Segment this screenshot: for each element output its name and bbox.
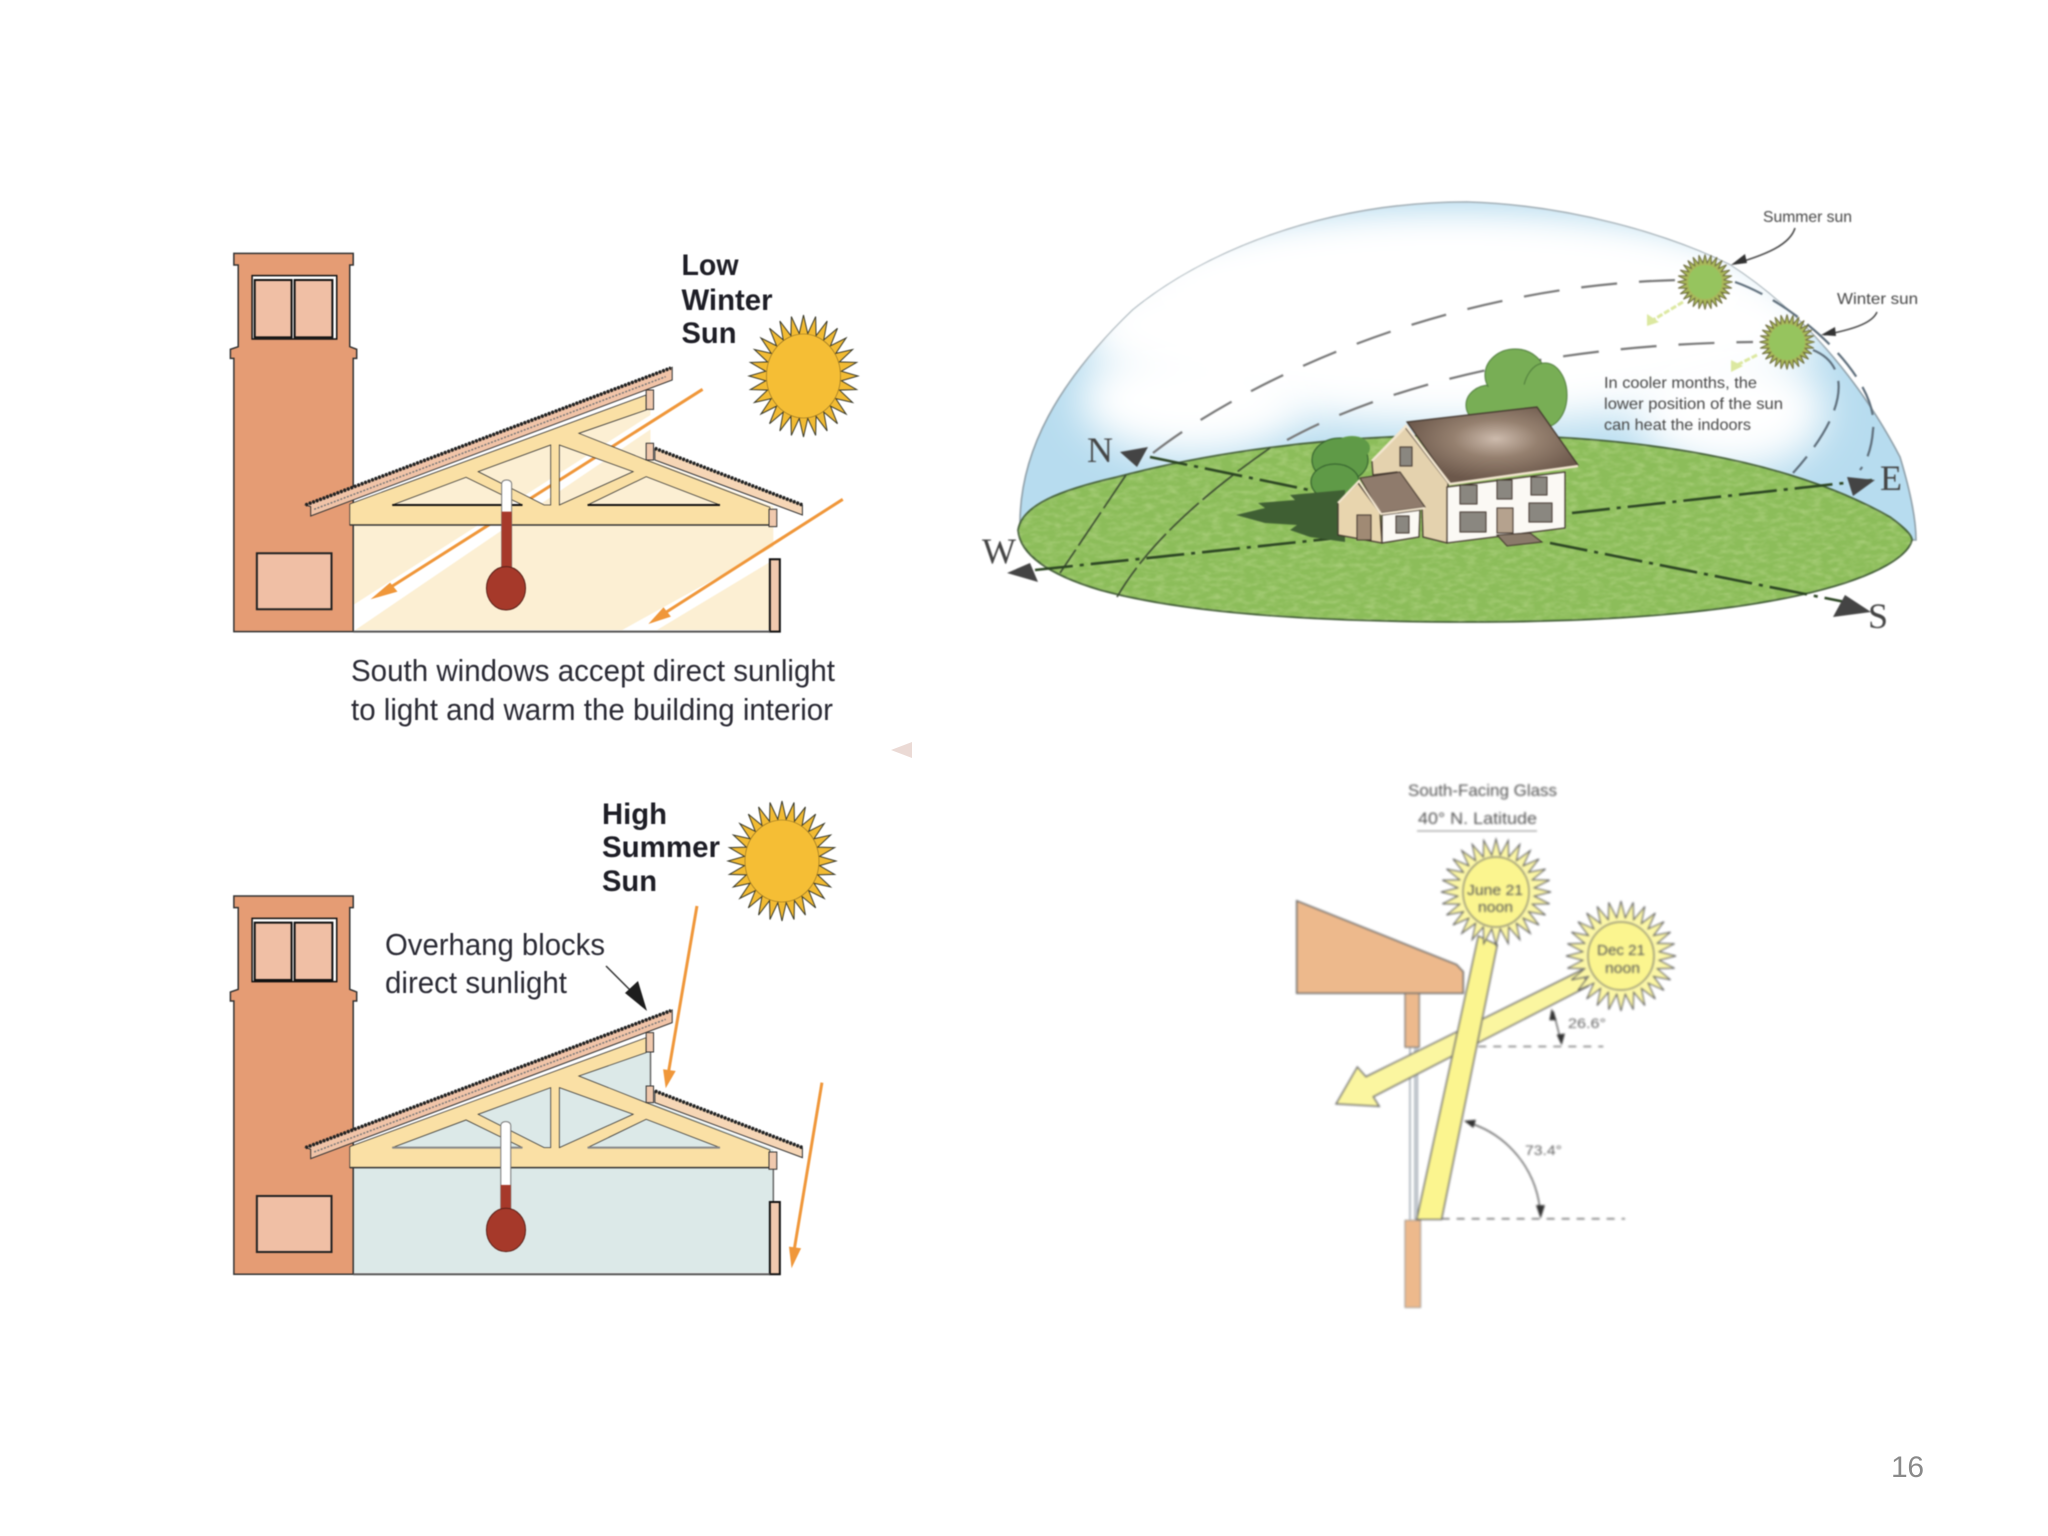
sun date labels: noon: [1605, 960, 1640, 977]
building section with winter sun penetrating: [230, 253, 843, 632]
tree beside house: [1311, 436, 1370, 500]
heading: south-facing glass: 40° N. Latitude: [1418, 809, 1537, 828]
callout: overhang blocks direct sunlight: Overhang blocks: [385, 927, 605, 962]
compass labels: E: [1880, 458, 1902, 498]
angle labels: 26.6°: [1568, 1015, 1606, 1031]
icon: high summer sun: [728, 801, 836, 921]
callout: overhang blocks direct sunlight: direct sunlight: [385, 965, 567, 1000]
panel: high summer sun building section: [230, 798, 836, 1274]
icon: low winter sun: [749, 315, 858, 437]
sun date labels: Dec 21: [1597, 942, 1645, 959]
thermometer: warm: [486, 480, 526, 610]
dashed sun paths: [1060, 280, 1873, 597]
tree behind house: [1466, 349, 1567, 427]
sun labels with leader arrows: Winter sun: [1837, 291, 1918, 308]
panel: sun path dome: [982, 202, 1918, 636]
sun labels with leader arrows: Summer sun: [1763, 209, 1852, 226]
building section with overhang shading summer sun: [230, 896, 822, 1274]
heading: low winter sun: [682, 249, 773, 350]
sun labels with leader arrows: [1731, 209, 1918, 336]
sun date labels: June 21: [1467, 882, 1523, 899]
compass labels: N: [1087, 430, 1113, 470]
heading: high summer sun: High: [602, 798, 667, 831]
text: cooler months note: lower position of the sun: [1604, 396, 1783, 413]
arrow: callout to overhang: [606, 966, 647, 1011]
icon: summer sun marker: [1647, 254, 1732, 326]
caption: south windows: to light and warm the building interior: [351, 692, 833, 727]
text: cooler months note: can heat the indoors: [1604, 417, 1751, 434]
callout: overhang blocks direct sunlight: [385, 927, 605, 1000]
panel: south-facing glass sun angles: [1297, 781, 1676, 1307]
compass axes and arrowheads: [1007, 447, 1875, 617]
heading: high summer sun: [602, 798, 720, 898]
icon: June 21 noon sun: [1441, 839, 1551, 945]
icon: winter sun marker: [1731, 314, 1814, 372]
text: cooler months note: [1604, 375, 1783, 434]
caption: south windows: [351, 653, 835, 727]
angle labels: 73.4°: [1525, 1142, 1562, 1158]
compass labels: S: [1868, 596, 1888, 636]
heading: high summer sun: Sun: [602, 865, 657, 898]
slide number: 16: [1891, 1451, 1924, 1484]
heading: low winter sun: Sun: [682, 317, 736, 350]
small pointer mark: [891, 742, 912, 758]
compass labels: W: [982, 531, 1016, 571]
compass labels: [982, 430, 1902, 636]
heading: south-facing glass: South-Facing Glass: [1408, 781, 1557, 800]
panel: low winter sun building section: [230, 249, 858, 727]
heading: south-facing glass: [1408, 781, 1557, 831]
wall, overhang and light beams: [1297, 901, 1625, 1307]
heading: low winter sun: Low: [682, 249, 739, 282]
thermometer: cool: [486, 1122, 526, 1252]
heading: high summer sun: Summer: [602, 831, 720, 864]
icon: Dec 21 noon sun: [1566, 901, 1676, 1011]
sun date labels: [1467, 882, 1645, 977]
text: cooler months note: In cooler months, the: [1604, 375, 1757, 392]
sky dome: [1020, 202, 1916, 540]
sun date labels: noon: [1478, 899, 1513, 916]
heading: low winter sun: Winter: [682, 284, 773, 317]
angle labels: [1525, 1015, 1606, 1158]
farmhouse with trees: [1236, 349, 1578, 546]
caption: south windows: South windows accept direct sunlight: [351, 653, 835, 688]
ground disc: [1018, 435, 1912, 622]
